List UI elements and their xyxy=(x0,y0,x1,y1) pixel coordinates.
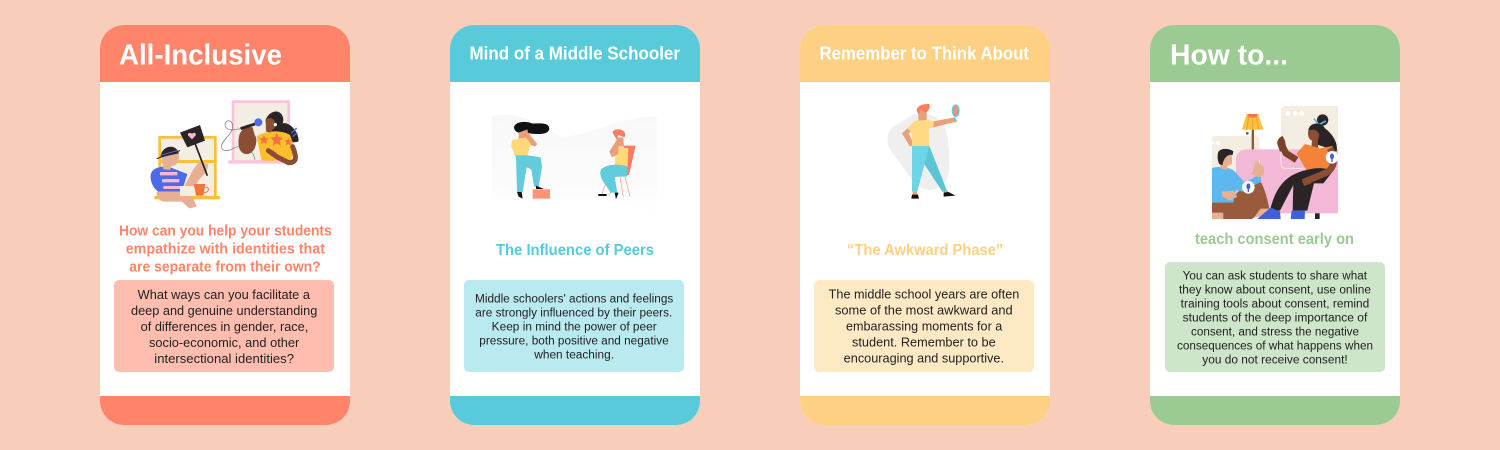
callout: awkward years: student. Remember to be xyxy=(852,335,996,349)
callout: What ways: intersectional identities? xyxy=(154,352,294,366)
header band: Mind of a Middle Schooler xyxy=(450,25,700,82)
panel: All-Inclusive xyxy=(100,25,350,425)
illustration: man with sign and woman singing at windows xyxy=(151,102,298,208)
callout: consent tips xyxy=(1165,262,1385,372)
subheading: How can you help: How can you help your students xyxy=(119,224,332,240)
subheading: teach consent early on: teach consent early on xyxy=(1195,231,1354,248)
footer band xyxy=(1150,396,1400,425)
callout: consent tips: training tools about consent, remind xyxy=(1181,298,1369,310)
callout: awkward years: embarassing moments for a xyxy=(846,319,1002,333)
callout: What ways: What ways can you facilitate a xyxy=(138,288,310,302)
callout: Middle schoolers: pressure, both positive and negative xyxy=(479,336,669,348)
callout: Middle schoolers xyxy=(464,280,684,372)
heading: How to...: How to... xyxy=(1170,40,1288,72)
footer band xyxy=(450,396,700,425)
callout: consent tips: consent, and stress the negative xyxy=(1191,326,1359,338)
callout: consent tips: students of the deep importance of xyxy=(1183,312,1368,324)
callout: Middle schoolers: are strongly influenced by their peers. xyxy=(475,308,672,320)
panel: How to... xyxy=(1150,25,1400,425)
callout: Middle schoolers: Middle schoolers' actions and feelings xyxy=(475,294,674,306)
callout: What ways xyxy=(114,280,334,372)
callout: consent tips: You can ask students to share what xyxy=(1183,270,1368,282)
subheading: How can you help: are separate from their own? xyxy=(129,260,321,276)
panel: Remember to Think About xyxy=(800,25,1050,425)
header band: All-Inclusive xyxy=(100,25,350,82)
heading: Remember to Think About: Remember to Think About xyxy=(820,44,1029,64)
callout: awkward years: The middle school years are often xyxy=(829,287,1019,301)
callout: consent tips: you do not receive consent! xyxy=(1202,354,1348,366)
subheading: The Awkward Phase: “The Awkward Phase” xyxy=(847,242,1003,259)
callout: What ways: socio-economic, and other xyxy=(149,336,299,350)
illustration: two students talking on phones xyxy=(492,115,657,213)
callout: Middle schoolers: Keep in mind the power of peer xyxy=(492,322,657,334)
callout: consent tips: consequences of what happens when xyxy=(1177,340,1373,352)
heading: All-Inclusive: All-Inclusive xyxy=(119,40,282,72)
illustration: two people on sofa in video call xyxy=(1212,106,1338,219)
subheading: How can you help xyxy=(119,224,332,276)
callout: What ways: of differences in gender, race, xyxy=(141,320,308,334)
header band: How to... xyxy=(1150,25,1400,82)
panel: Mind of a Middle Schooler xyxy=(450,25,700,425)
footer band xyxy=(100,396,350,425)
callout: awkward years xyxy=(814,280,1034,372)
illustration: person looking in hand mirror xyxy=(887,104,959,199)
heading: Mind of a Middle Schooler: Mind of a Middle Schooler xyxy=(470,44,680,64)
callout: What ways: deep and genuine understanding xyxy=(131,304,317,318)
callout: awkward years: some of the most awkward and xyxy=(835,303,1013,317)
subheading: How can you help: empathize with identities that xyxy=(126,242,325,258)
subheading: The Influence of Peers: The Influence of Peers xyxy=(496,242,654,259)
header band: Remember to Think About xyxy=(800,25,1050,82)
footer band xyxy=(800,396,1050,425)
callout: Middle schoolers: when teaching. xyxy=(533,350,614,362)
callout: consent tips: they know about consent, use online xyxy=(1179,284,1371,296)
callout: awkward years: encouraging and supportive. xyxy=(844,351,1004,365)
